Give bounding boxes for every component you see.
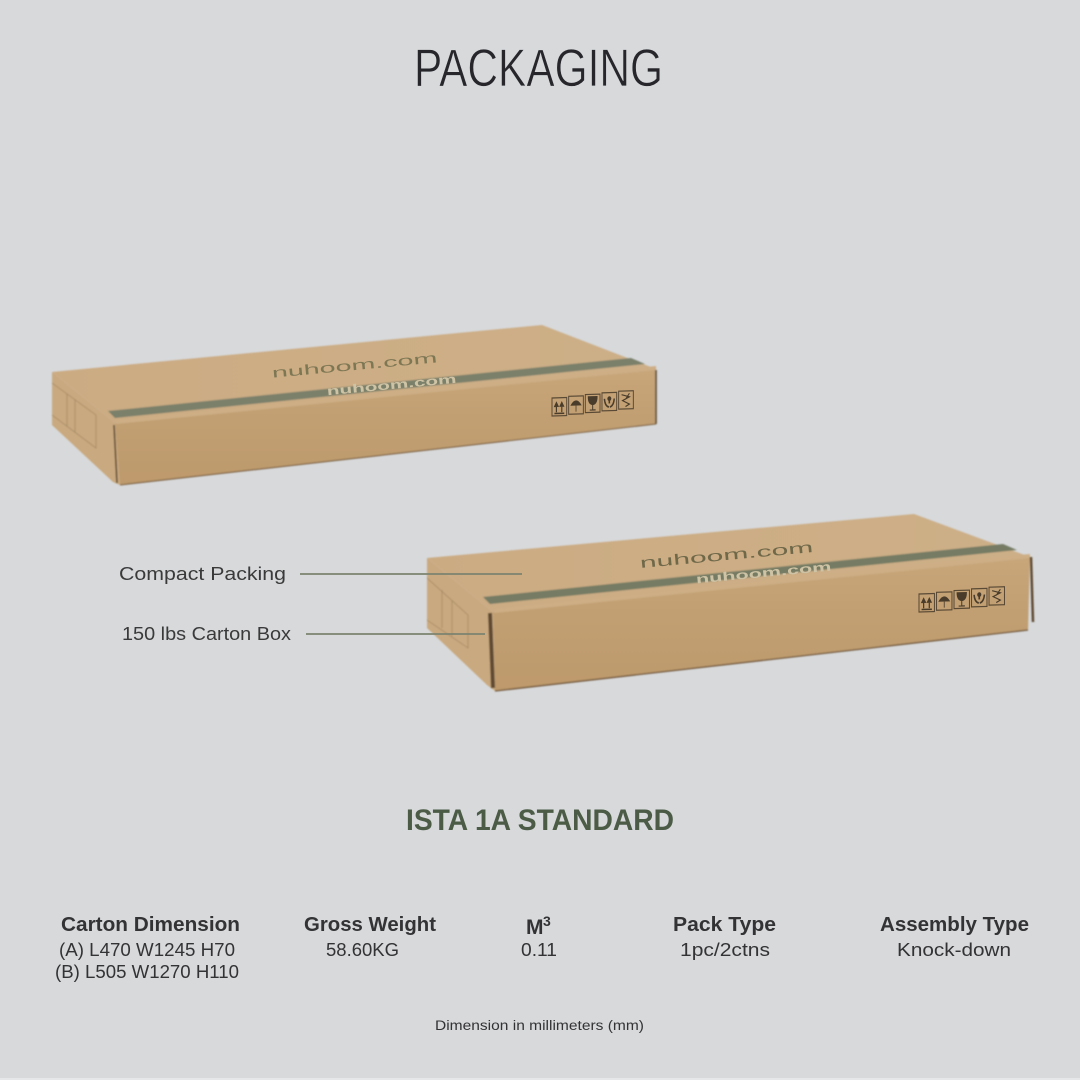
box B corner seams [490, 613, 493, 688]
box A handling icons [552, 391, 633, 416]
spec: pack type: 1pc/2ctns [680, 939, 770, 960]
box B green band [483, 544, 1017, 604]
box A side label lines [52, 383, 96, 448]
box B side label lines [427, 578, 468, 648]
spec: gross weight [304, 914, 436, 960]
spec: assembly type: Assembly Type [880, 914, 1029, 936]
carton box B [427, 514, 1033, 691]
spec: cubic metres: M [526, 916, 544, 939]
callout: carton box: 150 lbs Carton Box [122, 623, 292, 644]
spec: assembly type: Knock-down [897, 939, 1011, 960]
box A top logo: nuhoom.com [271, 349, 438, 381]
spec: gross weight: 58.60KG [326, 939, 399, 960]
spec: carton dimension: (B) L505 W1270 H110 [55, 961, 239, 982]
box B left end [427, 558, 495, 691]
spec: pack type: Pack Type [673, 914, 776, 936]
box B top logo: nuhoom.com [639, 539, 814, 572]
box A corner seams [114, 370, 656, 483]
box B fold highlight [494, 556, 1030, 611]
spec: assembly type [880, 914, 1029, 960]
box A fold highlight [116, 368, 656, 422]
spec: carton dimension: (A) L470 W1245 H70 [59, 939, 235, 960]
box B band logo: nuhoom.com [695, 560, 832, 587]
footnote: Dimension in millimeters (mm) [435, 1018, 644, 1033]
spec: cubic metres: 0.11 [521, 939, 557, 960]
spec: cubic metres: 3 [543, 913, 551, 929]
spec: pack type [673, 914, 776, 960]
spec: cubic metres [521, 913, 557, 960]
spec: gross weight: Gross Weight [304, 914, 436, 936]
box A top face [52, 325, 656, 423]
box A green band [108, 358, 645, 418]
standard heading: ISTA 1A STANDARD [406, 804, 674, 837]
box A front face [115, 369, 656, 485]
box A band logo: nuhoom.com [326, 372, 457, 398]
callout: compact packing: Compact Packing [119, 563, 286, 584]
box B top face [427, 514, 1030, 612]
box A left end [52, 372, 120, 485]
carton box A [52, 325, 656, 485]
box B front face [493, 557, 1030, 691]
title: PACKAGING [414, 39, 663, 98]
box B handling icons [919, 587, 1004, 612]
spec: carton dimension [55, 914, 240, 982]
spec: carton dimension: Carton Dimension [61, 914, 240, 936]
